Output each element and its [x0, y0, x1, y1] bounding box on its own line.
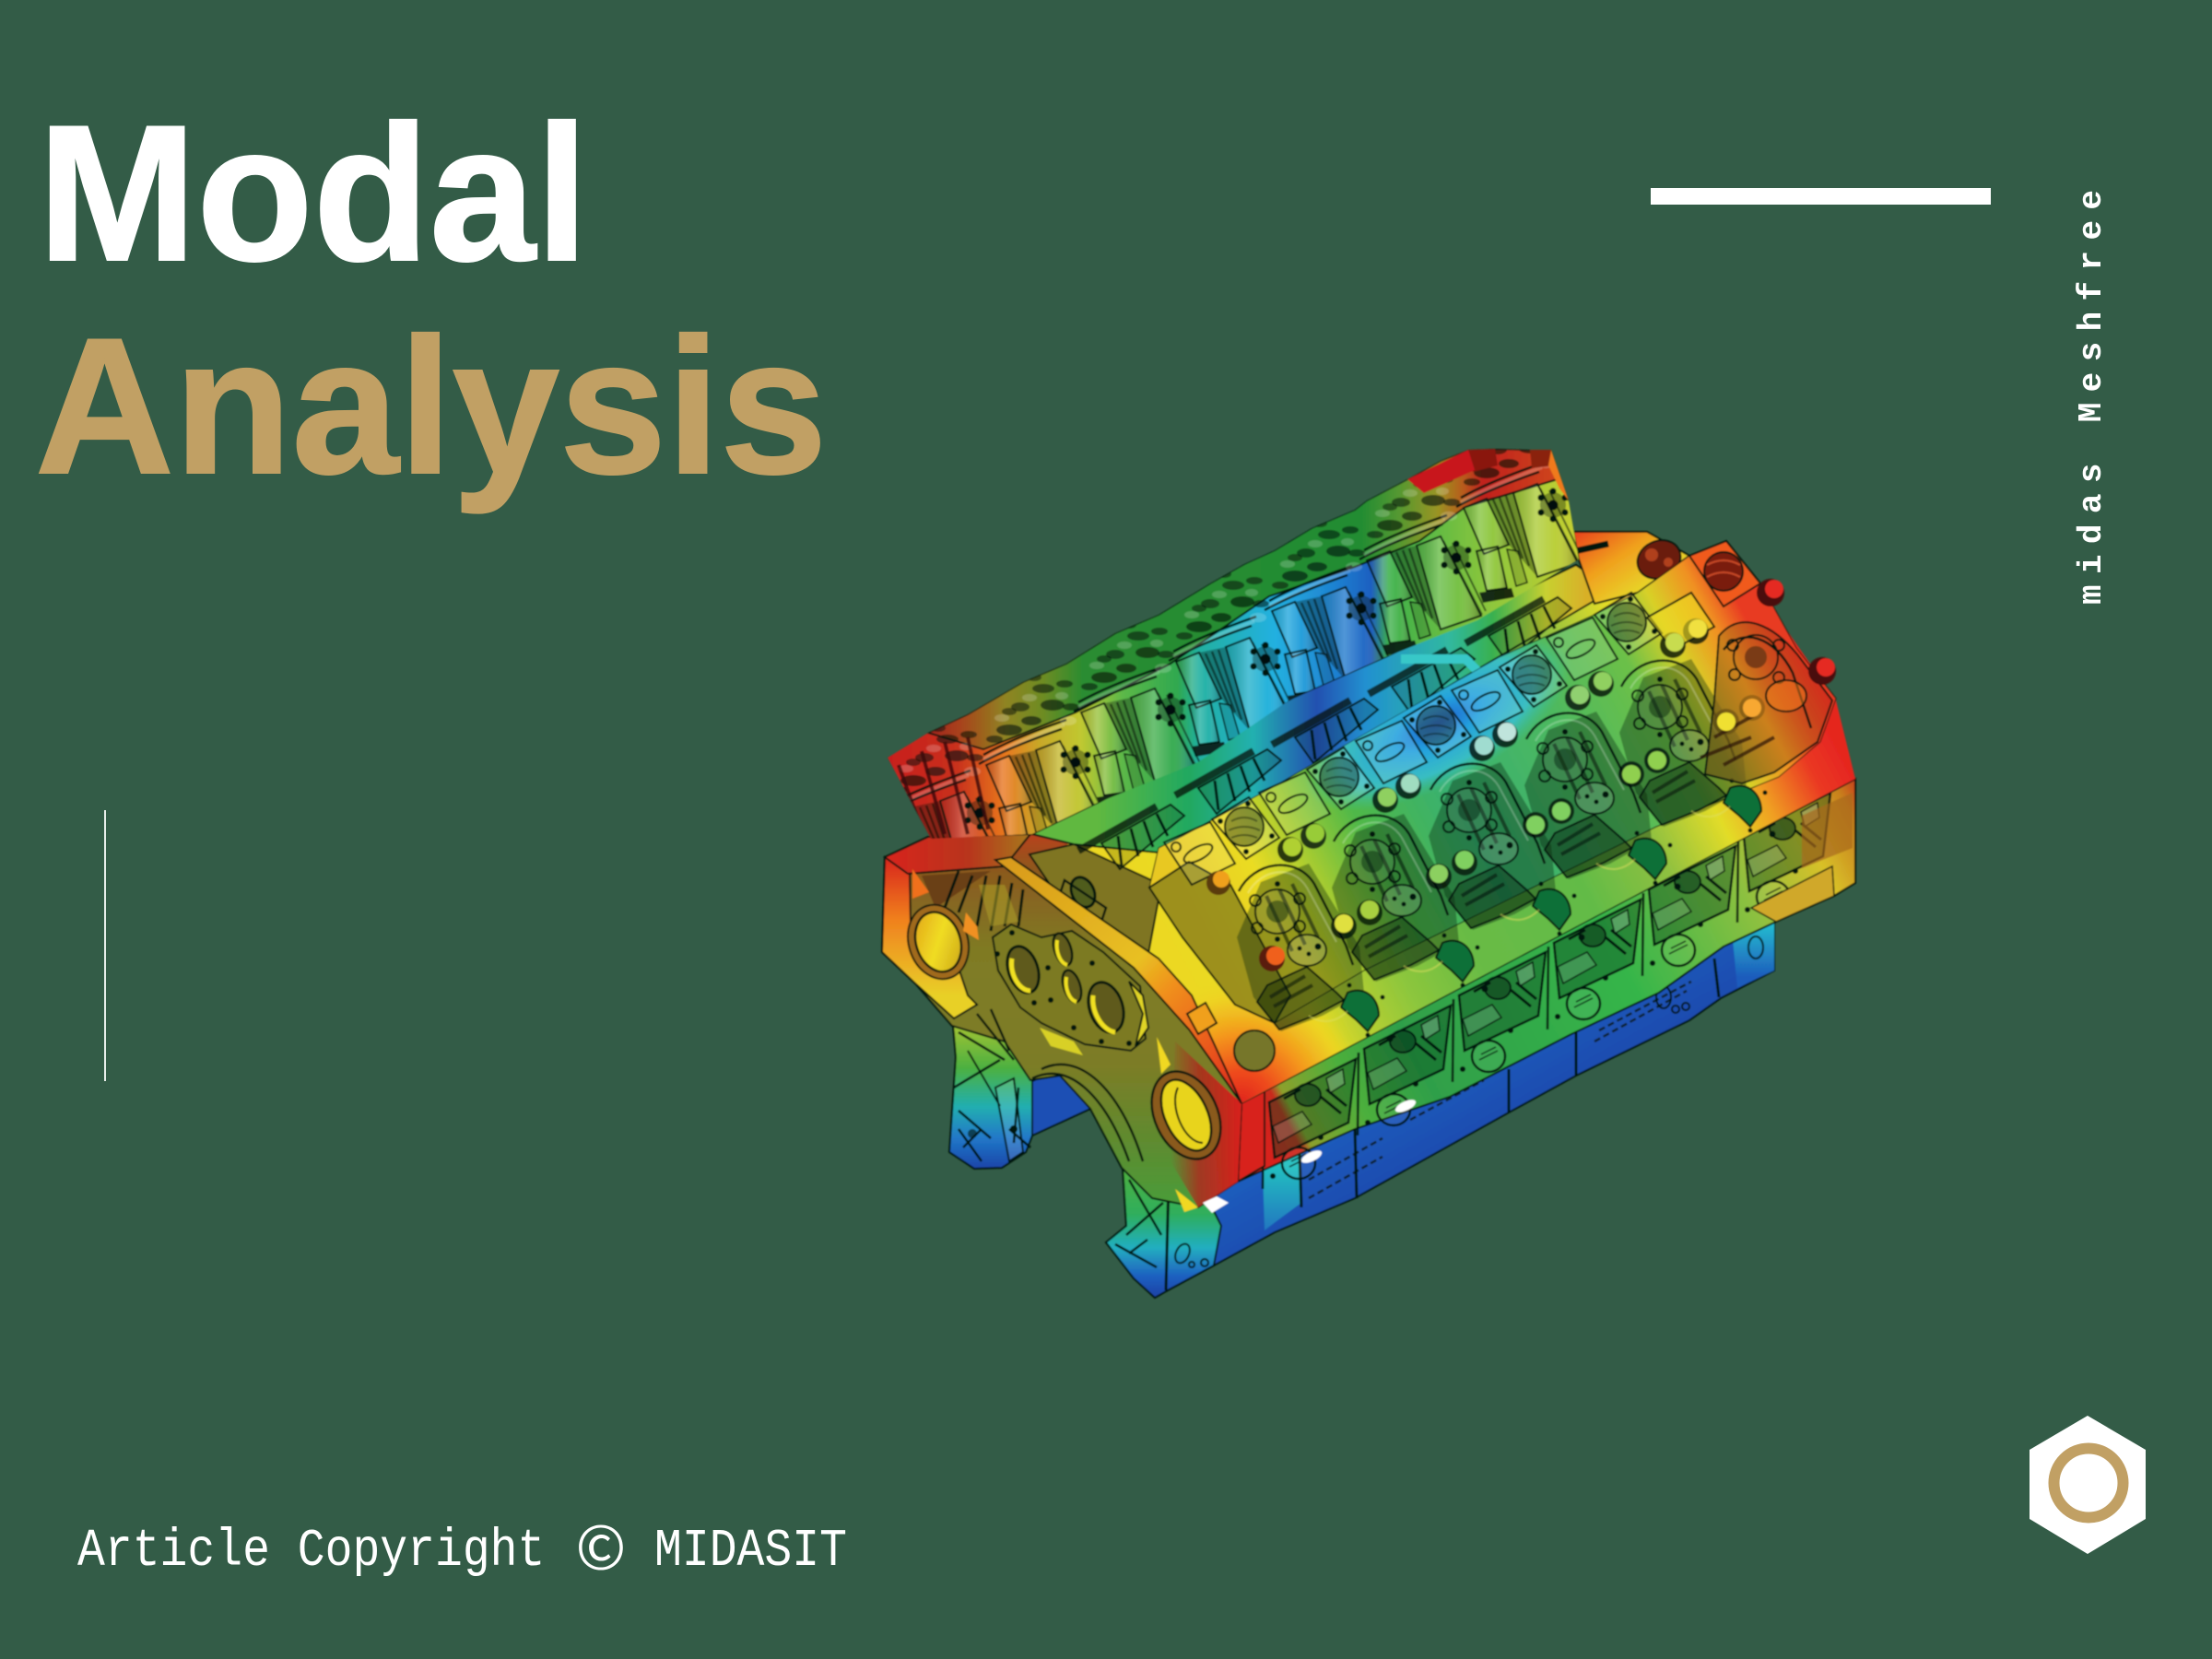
head band — [928, 449, 1569, 749]
front cylinder bank — [1149, 541, 1836, 1071]
copyright mark: © — [576, 1500, 626, 1588]
front leg — [1106, 1152, 1221, 1298]
title line: Modal: Modal — [38, 86, 588, 301]
title line: Analysis: Analysis — [35, 299, 827, 514]
engine block contour illustration — [882, 417, 1855, 1298]
end plate rim — [882, 857, 977, 1018]
last head unit, hot end — [1647, 541, 1832, 783]
deck surface — [1066, 553, 1855, 1103]
company name: MIDASIT — [654, 1522, 847, 1582]
left vertical rule — [104, 810, 106, 1081]
rear leg — [949, 1014, 1032, 1169]
top caps — [1468, 449, 1498, 472]
copyright words: Article Copyright — [77, 1522, 545, 1582]
end-plate edge strip — [995, 857, 1241, 1103]
end plate — [882, 834, 1241, 1212]
lower pair and top pair bolt faces — [1283, 619, 1761, 933]
crankcase front face — [1238, 779, 1855, 1189]
title — [35, 86, 827, 514]
rear bore — [899, 897, 978, 987]
vertical brand label: midas Meshfree — [2073, 180, 2111, 605]
top right port block — [1567, 532, 1689, 604]
olive left end of front bank — [1149, 862, 1290, 1023]
white specks — [1203, 1097, 1418, 1213]
front bore — [1138, 1060, 1234, 1171]
back cylinder bank — [887, 448, 1580, 840]
valley between banks — [1032, 565, 1613, 869]
end boss olive — [1234, 1030, 1275, 1071]
top horizontal bar — [1651, 188, 1991, 205]
copyright line — [77, 1500, 847, 1588]
end plate drilled gear plate — [993, 924, 1146, 1051]
crankcase pan — [1168, 922, 1774, 1290]
fan ribs — [922, 871, 991, 908]
icon: hexagon nut logo — [2030, 1416, 2146, 1554]
olive face beside strip — [1030, 844, 1161, 963]
red head end detail — [899, 737, 988, 834]
rear blue section behind arch — [1018, 1060, 1090, 1143]
orange and red highlighted bolts — [1206, 579, 1836, 971]
